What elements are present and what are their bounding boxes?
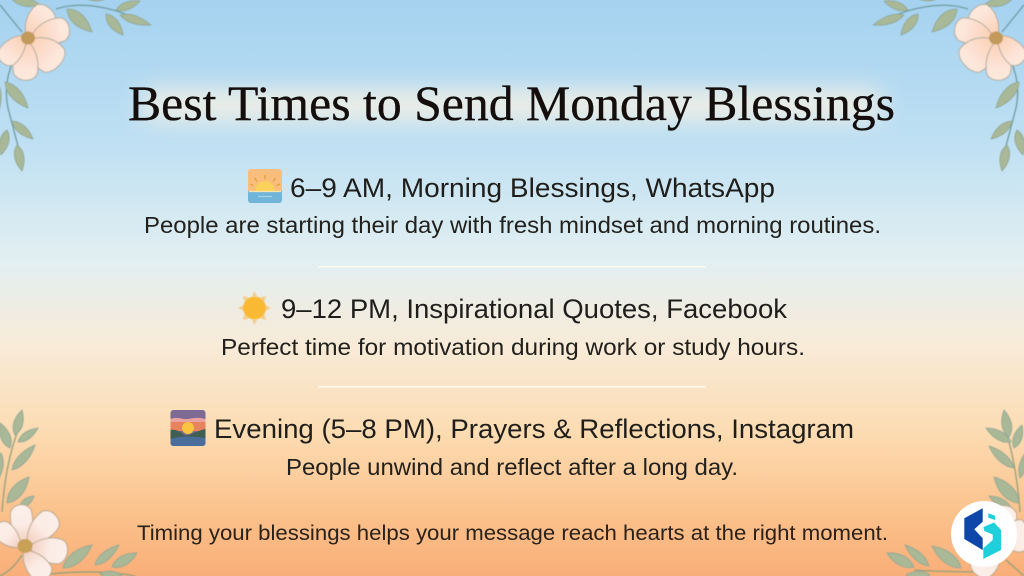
item 1: morning blessings bbox=[144, 169, 881, 238]
description: midday: Perfect time for motivation during work or study hours. bbox=[221, 334, 805, 360]
heading: evening: Evening (5–8 PM), Prayers & Reflections, Instagram bbox=[214, 414, 854, 444]
title: Best Times to Send Monday Blessings bbox=[128, 75, 895, 131]
heading: morning: 6–9 AM, Morning Blessings, WhatsApp bbox=[290, 173, 775, 203]
item 3: prayers and reflections bbox=[170, 410, 854, 480]
floral corner: bottom left bbox=[0, 409, 139, 576]
icon: sun bbox=[238, 291, 271, 325]
heading: midday: 9–12 PM, Inspirational Quotes, Facebook bbox=[281, 294, 787, 324]
floral corner: top left bbox=[0, 0, 152, 172]
logo badge bbox=[951, 501, 1017, 567]
title glow bbox=[140, 90, 884, 120]
description: evening: People unwind and reflect after a long day. bbox=[286, 454, 738, 480]
icon: sunset over mountains bbox=[170, 410, 206, 446]
floral corner: bottom right bbox=[885, 409, 1024, 576]
item 2: inspirational quotes bbox=[221, 291, 805, 360]
description: morning: People are starting their day with fresh mindset and morning routines. bbox=[144, 212, 881, 238]
divider 2 bbox=[318, 386, 706, 388]
divider 1 bbox=[318, 266, 706, 268]
footer note: Timing your blessings helps your message reach hearts at the right moment. bbox=[137, 521, 888, 545]
icon: sunrise over water bbox=[248, 169, 282, 203]
floral corner: top right bbox=[872, 0, 1024, 172]
